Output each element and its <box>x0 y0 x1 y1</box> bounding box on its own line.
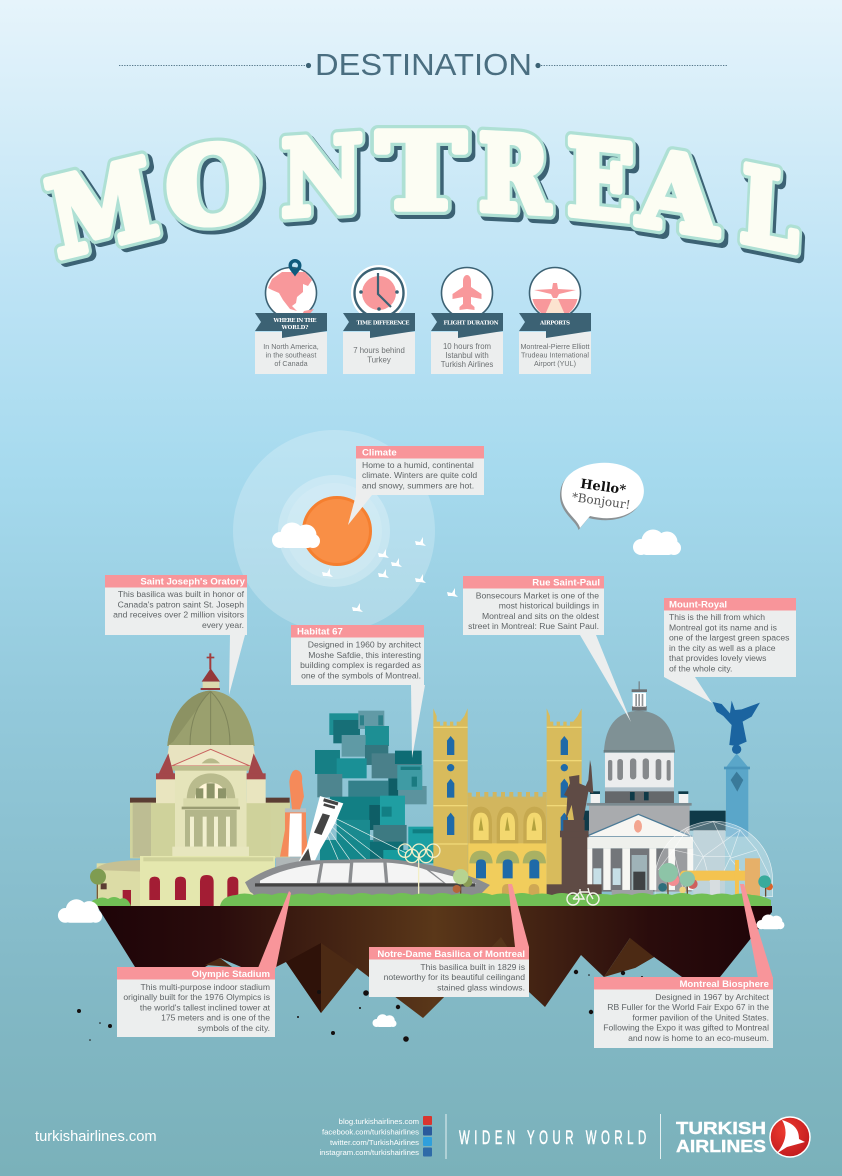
speech bubble: Hello Bonjour: Hello* <box>579 477 627 498</box>
panel: where in the world <box>255 259 327 374</box>
callout: Saint Joseph's Oratory: every year. <box>202 620 244 630</box>
panel: flight duration: FLIGHT DURATION <box>444 320 499 326</box>
callout: Climate: Home to a humid, continental <box>362 460 474 470</box>
panel: flight duration: Istanbul with <box>445 351 489 360</box>
title: Montreal: R <box>479 113 550 238</box>
panel: airports: AIRPORTS <box>539 320 570 326</box>
callout: Montreal Biosphere: Montreal Biosphere <box>679 979 769 990</box>
footer: social links: facebook.com/turkishairlines <box>322 1128 419 1136</box>
callout: Habitat 67: Moshe Safdie, this interesting <box>308 650 421 660</box>
panel: airports: Airport (YUL) <box>534 359 576 368</box>
callout: Habitat 67: Habitat 67 <box>297 626 343 638</box>
clouds around island <box>58 899 784 1027</box>
panel: flight duration <box>431 268 503 374</box>
icon: bicycle <box>567 888 599 905</box>
heading: Destination: DESTINATION <box>315 48 532 82</box>
footer: social links <box>319 1116 432 1157</box>
illustration: Habitat 67 <box>315 711 447 863</box>
callout: Notre-Dame Basilica of Montreal: This basilica built in 1829 is <box>420 962 525 972</box>
title: Montreal: O <box>166 124 267 256</box>
callout: Mount-Royal <box>664 598 796 703</box>
callout: Habitat 67: one of the symbols of Montreal. <box>301 670 421 680</box>
sun with halos <box>233 430 435 632</box>
callout: Rue Saint-Paul: Bonsecours Market is one of the <box>476 590 599 600</box>
callout: Climate: Climate <box>362 448 397 458</box>
title: Montreal: E <box>567 116 635 245</box>
callout: Climate: and snowy, summers are hot. <box>362 480 474 490</box>
callout: Saint Joseph's Oratory: and receives over 2 million visitors <box>113 610 244 620</box>
soil debris <box>77 970 643 1042</box>
panel: airports: Trudeau International <box>521 350 589 360</box>
callout: Climate: climate. Winters are quite cold <box>362 470 477 480</box>
callout: Rue Saint-Paul: most historical buildings in <box>499 600 599 610</box>
callout: Olympic Stadium: This multi-purpose indoor stadium <box>141 982 270 992</box>
speech bubble: Hello Bonjour <box>560 463 644 530</box>
panel: airports <box>519 268 591 374</box>
footer: Turkish Airlines wordmark: AIRLINES <box>676 1136 766 1156</box>
callout: Mount-Royal: of the whole city. <box>669 664 732 674</box>
callout: Mount-Royal: that provides lovely views <box>669 653 766 663</box>
callout: Habitat 67 <box>291 625 425 758</box>
title: Montreal: A <box>636 127 721 261</box>
callout: Mount-Royal: Mount-Royal <box>669 600 727 610</box>
title: Montreal: A <box>639 132 725 266</box>
illustration: Olympic Stadium <box>245 796 490 897</box>
floating island <box>97 906 772 1018</box>
title: Montreal: A <box>636 127 721 261</box>
title: Montreal: T <box>377 111 465 233</box>
footer: social links: blog.turkishairlines.com <box>339 1117 419 1126</box>
callout: Saint Joseph's Oratory: Saint Joseph's Oratory <box>140 576 246 588</box>
title: Montreal: R <box>482 117 554 242</box>
callout: Montreal Biosphere <box>594 884 773 1048</box>
footer: Turkish Airlines wordmark <box>676 1118 766 1156</box>
callout: Notre-Dame Basilica of Montreal: noteworthy for its beautiful ceilingand <box>384 972 525 982</box>
panel: where in the world: WHERE IN THE <box>272 318 316 324</box>
footer: Turkish Airlines wordmark: TURKISH <box>676 1118 766 1138</box>
title: Montreal <box>38 111 805 286</box>
title: Montreal: O <box>163 121 263 252</box>
icon: runway and plane <box>530 268 580 318</box>
panel: time difference: Turkey <box>367 356 391 364</box>
title: Montreal: M <box>43 138 171 285</box>
illustration: Olympic rings <box>398 844 440 897</box>
callout: Montreal Biosphere: and now is home to an eco-museum. <box>628 1033 769 1043</box>
callout: Mount-Royal: one of the largest green spaces <box>669 632 789 642</box>
callout: Olympic Stadium <box>117 891 291 1037</box>
callout: Rue Saint-Paul <box>463 576 631 722</box>
title: Montreal: L <box>738 144 802 277</box>
panel: airports: Montreal-Pierre Elliott <box>520 342 590 351</box>
panel: flight duration: 10 hours from <box>443 342 491 351</box>
footer: website: turkishairlines.com <box>35 1129 157 1145</box>
icon: plane <box>442 268 492 318</box>
title: Montreal: L <box>741 148 805 282</box>
callout: Mount-Royal: in the city as well as a place <box>669 643 776 653</box>
callout: Olympic Stadium: symbols of the city. <box>198 1023 270 1033</box>
callout: Montreal Biosphere: former pavilion of the United States. <box>632 1012 769 1022</box>
title: Montreal: T <box>377 111 465 233</box>
panel: time difference <box>343 266 415 374</box>
callout: Olympic Stadium: 175 meters and is one of the <box>161 1012 270 1022</box>
callout: Saint Joseph's Oratory: This basilica was built in honor of <box>118 589 245 599</box>
heading: Destination <box>119 48 727 82</box>
callout: Mount-Royal: Montreal got its name and is <box>669 622 777 632</box>
callout: Montreal Biosphere: Following the Expo it was gifted to Montreal <box>603 1022 769 1032</box>
illustration: Bonsecours Market <box>583 681 726 897</box>
illustration: small trees <box>453 863 773 898</box>
icon: Turkish Airlines logo <box>770 1117 810 1157</box>
panel: where in the world: WORLD? <box>281 325 308 331</box>
title: Montreal: L <box>738 144 802 277</box>
callout: Saint Joseph's Oratory <box>105 575 247 695</box>
panel: time difference: 7 hours behind <box>353 346 405 355</box>
callout: Olympic Stadium: the world's tallest inclined tower at <box>140 1002 271 1012</box>
icon: clock <box>352 266 406 320</box>
title: Montreal: M <box>38 135 166 282</box>
callout: Mount-Royal: This is the hill from which <box>669 612 765 622</box>
title: Montreal: N <box>281 113 363 240</box>
cloud by sun <box>272 522 320 548</box>
callout: Notre-Dame Basilica of Montreal <box>369 884 529 997</box>
callout: Saint Joseph's Oratory: Canada's patron saint St. Joseph <box>118 600 244 610</box>
panel: where in the world: in the southeast <box>266 350 316 360</box>
illustration: Biosphere <box>655 821 773 897</box>
callout: Montreal Biosphere: RB Fuller for the World Fair Expo 67 in the <box>607 1002 769 1012</box>
title: Montreal: E <box>570 120 639 250</box>
illustration: Notre-Dame Basilica <box>433 708 582 897</box>
title: Montreal: T <box>380 115 469 237</box>
callout: Olympic Stadium: Olympic Stadium <box>192 969 270 980</box>
callout: Rue Saint-Paul: Rue Saint-Paul <box>532 578 600 588</box>
illustration: Maisonneuve statue <box>547 760 602 898</box>
callout: Notre-Dame Basilica of Montreal: stained glass windows. <box>437 982 525 992</box>
illustration: Saint Joseph's Oratory <box>90 653 290 906</box>
callout: Habitat 67: building complex is regarded as <box>300 660 421 670</box>
callout: Rue Saint-Paul: Montreal and sits on the oldest <box>482 611 600 621</box>
callout: Rue Saint-Paul: street in Montreal: Rue Saint Paul. <box>468 621 599 631</box>
flock of birds <box>322 537 458 612</box>
icon: globe with pin <box>266 259 316 318</box>
title: Montreal: R <box>479 113 550 238</box>
callout: Notre-Dame Basilica of Montreal: Notre-Dame Basilica of Montreal <box>377 949 525 960</box>
footer: dividers <box>446 1114 660 1159</box>
title: Montreal: N <box>285 116 366 244</box>
title: Montreal: O <box>163 121 263 252</box>
footer: social links: twitter.com/TurkishAirlines <box>330 1138 419 1147</box>
panel: where in the world: In North America, <box>263 342 319 351</box>
illustration: Saint Joseph's statue <box>276 770 308 867</box>
title: Montreal: E <box>567 116 635 245</box>
speech bubble: Hello Bonjour: *Bonjour! <box>571 490 631 512</box>
panel: flight duration: Turkish Airlines <box>441 360 493 369</box>
panel: time difference: TIME DIFFERENCE <box>356 320 410 326</box>
footer: slogan: WIDEN YOUR WORLD <box>459 1128 646 1149</box>
footer: social links: instagram.com/turkishairlines <box>319 1148 419 1157</box>
cloud right of bubble <box>633 530 681 555</box>
illustration: Mount-Royal monument <box>713 701 760 837</box>
callout: Olympic Stadium: originally built for the 1976 Olympics is <box>123 992 270 1002</box>
panel: where in the world: of Canada <box>274 359 308 368</box>
callout: Habitat 67: Designed in 1960 by architect <box>308 640 422 650</box>
title: Montreal: M <box>38 135 166 282</box>
callout: Montreal Biosphere: Designed in 1967 by Architect <box>655 992 770 1002</box>
title: Montreal: N <box>281 113 363 240</box>
callout: Climate <box>348 446 484 525</box>
illustration: grass strip <box>90 893 771 906</box>
